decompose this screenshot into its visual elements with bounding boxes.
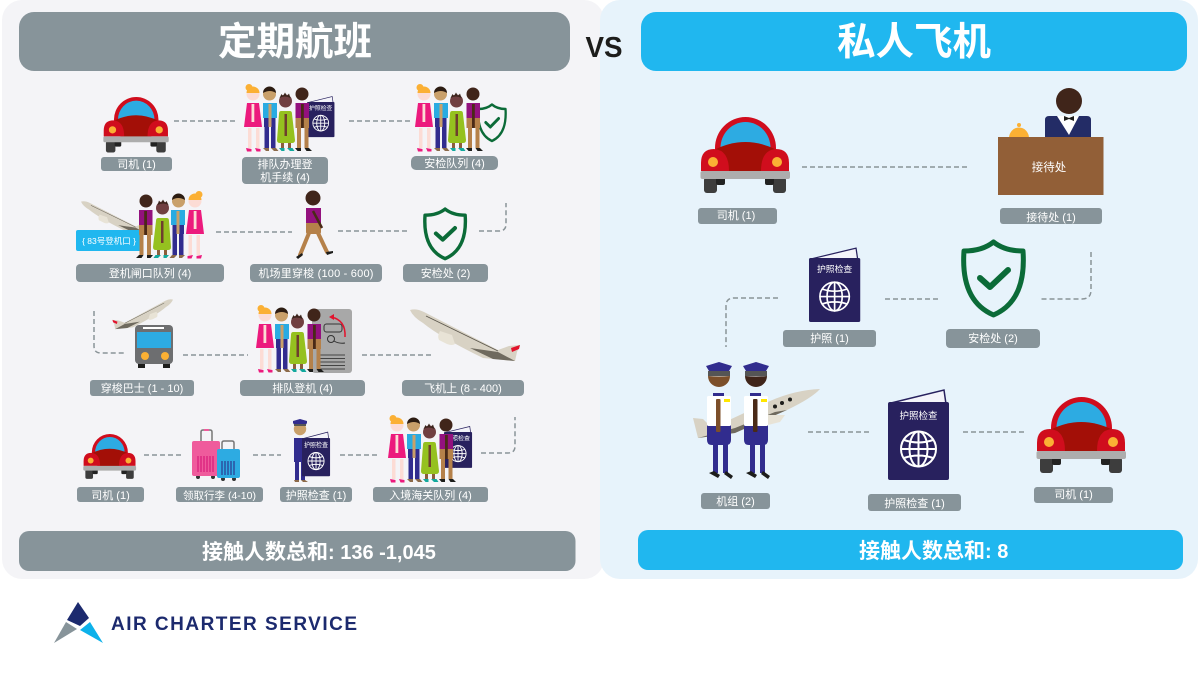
label: driver — [101, 157, 172, 171]
icon: passport control — [888, 390, 949, 480]
label: airport transit: 机场里穿梭 (100 - 600) — [258, 266, 374, 280]
label: check-in queue: 机手续 (4) — [260, 170, 310, 184]
label: driver: 司机 (1) — [717, 208, 755, 222]
label: security: 安检处 (2) — [421, 266, 470, 280]
label: security — [403, 264, 488, 282]
label: airport transit — [250, 264, 382, 282]
icon: immigration queue: 护照检查 — [446, 434, 470, 442]
label: check-in queue — [242, 157, 328, 184]
vs label: VS — [586, 32, 622, 64]
icon: shuttle bus — [112, 299, 173, 368]
label: security queue — [411, 156, 498, 170]
heading: private jet — [641, 12, 1187, 71]
icon: crew and jet — [693, 362, 820, 479]
label: on board — [402, 380, 524, 396]
label: security — [946, 329, 1040, 348]
icon: passport officer — [293, 419, 330, 482]
label: baggage claim: 领取行李 (4-10) — [183, 489, 256, 502]
icon: boarding queue — [256, 305, 352, 373]
label: passport: 护照 (1) — [810, 331, 849, 345]
icon: passport control: 护照检查 — [899, 410, 938, 422]
icon: security shield — [964, 242, 1023, 315]
icon: driver car — [103, 97, 169, 152]
label: driver: 司机 (1) — [117, 157, 156, 171]
label: driver: 司机 (1) — [1054, 487, 1093, 501]
label: driver — [1034, 487, 1113, 503]
label: immigration queue — [373, 487, 488, 502]
label: immigration queue: 入境海关队列 (4) — [389, 488, 472, 502]
sub: pilot two — [743, 362, 770, 479]
label: boarding queue — [240, 380, 365, 396]
icon: driver car — [700, 117, 790, 193]
label: security: 安检处 (2) — [968, 331, 1018, 345]
icon: check-in queue — [244, 84, 334, 152]
label: on board: 飞机上 (8 - 400) — [424, 381, 502, 395]
label: check-in queue: 排队办理登 — [258, 157, 312, 171]
label: passport control: 护照检查 (1) — [286, 488, 346, 502]
heading: scheduled flights — [19, 12, 570, 71]
icon: check-in queue: 护照检查 — [309, 104, 333, 112]
icon: gate queue — [76, 191, 204, 258]
icon: airliner — [410, 309, 520, 361]
total bar: scheduled: 接触人数总和: 136 -1,045 — [202, 541, 436, 564]
icon: reception desk — [998, 88, 1104, 195]
label: reception — [1000, 208, 1102, 224]
connectors, left panel — [94, 121, 515, 455]
label: driver — [77, 487, 144, 502]
heading: private jet: 私人飞机 — [837, 21, 991, 64]
total bar: private — [638, 530, 1183, 570]
sub: pilot one — [706, 362, 733, 479]
label: driver: 司机 (1) — [91, 488, 130, 502]
icon: gate queue: { 83号登机口 } — [82, 236, 136, 246]
label: passport control: 护照检查 (1) — [884, 496, 945, 510]
icon: immigration queue — [388, 415, 472, 482]
label: shuttle bus: 穿梭巴士 (1 - 10) — [101, 381, 183, 395]
label: passport control — [280, 487, 352, 502]
label: passport control — [868, 494, 961, 511]
icon: passport officer: 护照检查 — [304, 441, 328, 449]
connectors, right panel — [726, 167, 1091, 432]
panel: private jet — [600, 0, 1198, 579]
total bar: scheduled — [19, 531, 576, 571]
label: crew — [701, 493, 770, 509]
icon: driver car — [83, 434, 136, 479]
logo: Air Charter Service: AIR CHARTER SERVICE — [111, 614, 357, 635]
icon: passport: 护照检查 — [817, 263, 853, 274]
icon: security shield — [425, 209, 465, 259]
total bar: private: 接触人数总和: 8 — [859, 540, 1008, 563]
icon: security queue — [415, 84, 506, 152]
heading: scheduled flights: 定期航班 — [218, 21, 372, 64]
label: security queue: 安检队列 (4) — [424, 156, 485, 170]
panel: scheduled flights — [2, 0, 604, 579]
label: baggage claim — [176, 487, 263, 502]
label: shuttle bus — [90, 380, 194, 396]
label: driver — [698, 208, 777, 224]
label: passport — [783, 330, 876, 347]
icon: driver car — [1036, 397, 1126, 473]
label: boarding queue: 排队登机 (4) — [272, 381, 333, 395]
label: reception: 接待处 (1) — [1026, 210, 1076, 224]
label: gate queue — [76, 264, 224, 282]
label: gate queue: 登机闸口队列 (4) — [109, 266, 191, 280]
icon: luggage — [192, 430, 240, 481]
logo: Air Charter Service — [54, 602, 357, 643]
icon: reception desk: 接待处 — [1032, 160, 1067, 174]
icon: passport — [809, 248, 860, 322]
icon: walking person — [296, 190, 333, 259]
label: crew: 机组 (2) — [716, 494, 755, 508]
